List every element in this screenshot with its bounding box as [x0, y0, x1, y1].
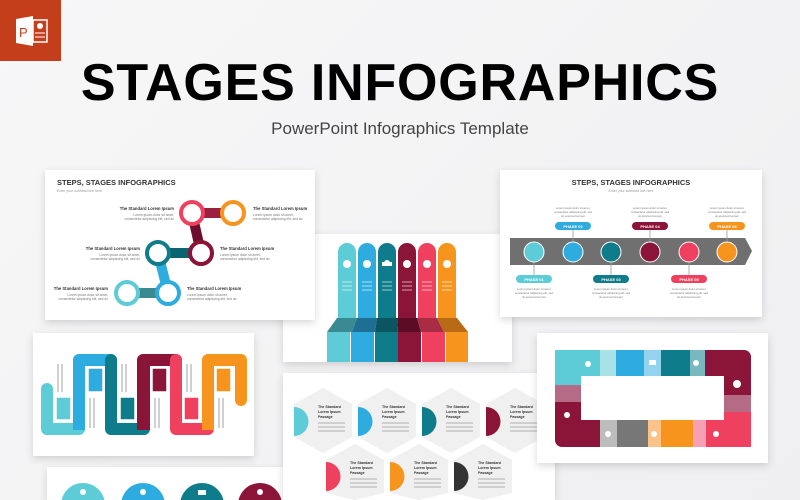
panel: chain slide: Lorem ipsum dolor sit amet,: [133, 213, 174, 217]
phase labels: PHASE 06: [717, 224, 737, 229]
chain labels: [54, 206, 307, 291]
panel: chain slide: consectetur adipiscing elit, sed do: [187, 297, 237, 301]
panel: chain slide: consectetur adipiscing elit, sed do: [59, 297, 108, 301]
panel: chain slide: consectetur adipiscing elit, sed do: [220, 257, 270, 261]
panel: phases timeline slide: Lorem ipsum dolor sit amet,: [594, 287, 628, 291]
panel: bottom-left circles slide: [47, 467, 287, 500]
panel: hexagons slide: The Standard: [478, 461, 501, 465]
panel: phases timeline slide: do eiusmod tempor: [638, 214, 662, 218]
panel: hexagons slide: Passage: [478, 471, 493, 475]
panel: hexagons slide: The Standard: [382, 405, 405, 409]
chain labels: The Standard Lorem Ipsum: [54, 286, 108, 291]
half-circle badges: [294, 407, 500, 491]
panel: phases timeline slide: consectetur adipiscing elit, sed: [554, 210, 592, 214]
panel: chain slide: Lorem ipsum dolor sit amet,: [220, 253, 261, 257]
panel: hexagons slide: The Standard: [350, 461, 373, 465]
phase labels: PHASE 05: [679, 277, 699, 282]
panel: phases timeline slide: Lorem ipsum dolor sit amet,: [556, 206, 590, 210]
phase labels: PHASE 01: [524, 277, 544, 282]
panel: hexagons slide: Lorem Ipsum: [478, 466, 501, 470]
panel: hexagons slide: Lorem Ipsum: [318, 410, 341, 414]
panel: hexagons slide: The Standard: [510, 405, 533, 409]
chain labels: The Standard Lorem Ipsum: [120, 206, 174, 211]
panel: chain slide: [45, 170, 315, 320]
panel: phases timeline slide: consectetur adipiscing elit, sed: [592, 291, 630, 295]
panel: phases timeline slide: consectetur adipiscing elit, sed: [631, 210, 669, 214]
panel: hexagons slide: The Standard: [446, 405, 469, 409]
chain labels: The Standard Lorem Ipsum: [220, 246, 274, 251]
panel: phases timeline slide: do eiusmod tempor: [677, 295, 701, 299]
panel: phases timeline slide: [500, 170, 762, 317]
panel: frame tiles slide: [537, 333, 768, 463]
columns: [338, 243, 456, 318]
chain circles: [116, 202, 244, 304]
perspective base: [327, 318, 468, 362]
panel: chain slide: Lorem ipsum dolor sit amet,: [99, 253, 140, 257]
logo: powerpoint icon: P: [19, 25, 28, 40]
phase labels: PHASE 02: [563, 224, 583, 229]
title: STAGES INFOGRAPHICS: [81, 54, 719, 112]
panel: phases timeline slide: STEPS, STAGES INFOGRAPHICS: [572, 178, 690, 187]
phase labels: PHASE 04: [640, 224, 660, 229]
step icon boxes: [56, 368, 231, 420]
panel: phases timeline slide: do eiusmod tempor: [715, 214, 739, 218]
serpentine bars: [41, 354, 247, 435]
panel: hexagons slide: Lorem Ipsum: [350, 466, 373, 470]
panel: hexagons slide: Lorem Ipsum: [382, 410, 405, 414]
panel: phases timeline slide: consectetur adipiscing elit, sed: [515, 291, 553, 295]
panel: chain slide: consectetur adipiscing elit, sed do: [91, 257, 140, 261]
tile frame: [555, 350, 751, 447]
panel: hexagons slide: Passage: [414, 471, 429, 475]
panel: chain slide: Lorem ipsum dolor sit amet,: [253, 213, 294, 217]
panel: center columns slide: [283, 234, 512, 362]
phase circles: [524, 242, 737, 262]
arrow band: [510, 238, 752, 265]
vertical captions: [58, 364, 223, 428]
panel: phases timeline slide: do eiusmod tempor: [561, 214, 585, 218]
panel: phases timeline slide: do eiusmod tempor: [522, 295, 546, 299]
panel: phases timeline slide: Lorem ipsum dolor sit amet,: [633, 206, 667, 210]
panel: hexagons slide: Passage: [350, 471, 365, 475]
connector stems: [534, 230, 727, 275]
panel: phases timeline slide: consectetur adipiscing elit, sed: [670, 291, 708, 295]
subtitle: PowerPoint Infographics Template: [271, 119, 529, 138]
panel: phases timeline slide: Lorem ipsum dolor sit amet,: [710, 206, 744, 210]
panel: hexagons slide: The Standard: [318, 405, 341, 409]
panel: chain slide: Enter your subhead line here: [57, 189, 102, 193]
panel: hexagons slide: Passage: [510, 415, 525, 419]
slide heading: STEPS, STAGES INFOGRAPHICS: [57, 178, 176, 187]
panel: hexagons slide: The Standard: [414, 461, 437, 465]
panel: phases timeline slide: Lorem ipsum dolor sit amet,: [672, 287, 706, 291]
phase labels: [516, 222, 745, 283]
panel: hexagons slide: Passage: [382, 415, 397, 419]
panel: phases timeline slide: Enter your subhead line here: [609, 189, 654, 193]
hexagons: [294, 388, 544, 500]
phase labels: PHASE 03: [601, 277, 621, 282]
panel: phases timeline slide: Lorem ipsum dolor sit amet,: [517, 287, 551, 291]
chain labels: The Standard Lorem Ipsum: [187, 286, 241, 291]
panel: serpentine slide: [33, 333, 254, 456]
chain labels: The Standard Lorem Ipsum: [253, 206, 307, 211]
panel: hexagons slide: Lorem Ipsum: [510, 410, 533, 414]
panel: hexagons slide: [283, 373, 555, 500]
panel: hexagons slide: Passage: [318, 415, 333, 419]
panel: hexagons slide: Lorem Ipsum: [446, 410, 469, 414]
panel: chain slide: Lorem ipsum dolor sit amet,: [67, 293, 108, 297]
panel: chain slide: consectetur adipiscing elit, sed do: [253, 217, 303, 221]
panel: phases timeline slide: do eiusmod tempor: [599, 295, 623, 299]
panel: hexagons slide: Lorem Ipsum: [414, 466, 437, 470]
panel: chain slide: consectetur adipiscing elit, sed do: [125, 217, 174, 221]
chain connectors: [127, 213, 233, 293]
panel: hexagons slide: Passage: [446, 415, 461, 419]
panel: chain slide: Lorem ipsum dolor sit amet,: [187, 293, 228, 297]
panel: phases timeline slide: consectetur adipiscing elit, sed: [708, 210, 746, 214]
logo: powerpoint icon: [0, 0, 61, 61]
chain labels: The Standard Lorem Ipsum: [86, 246, 140, 251]
